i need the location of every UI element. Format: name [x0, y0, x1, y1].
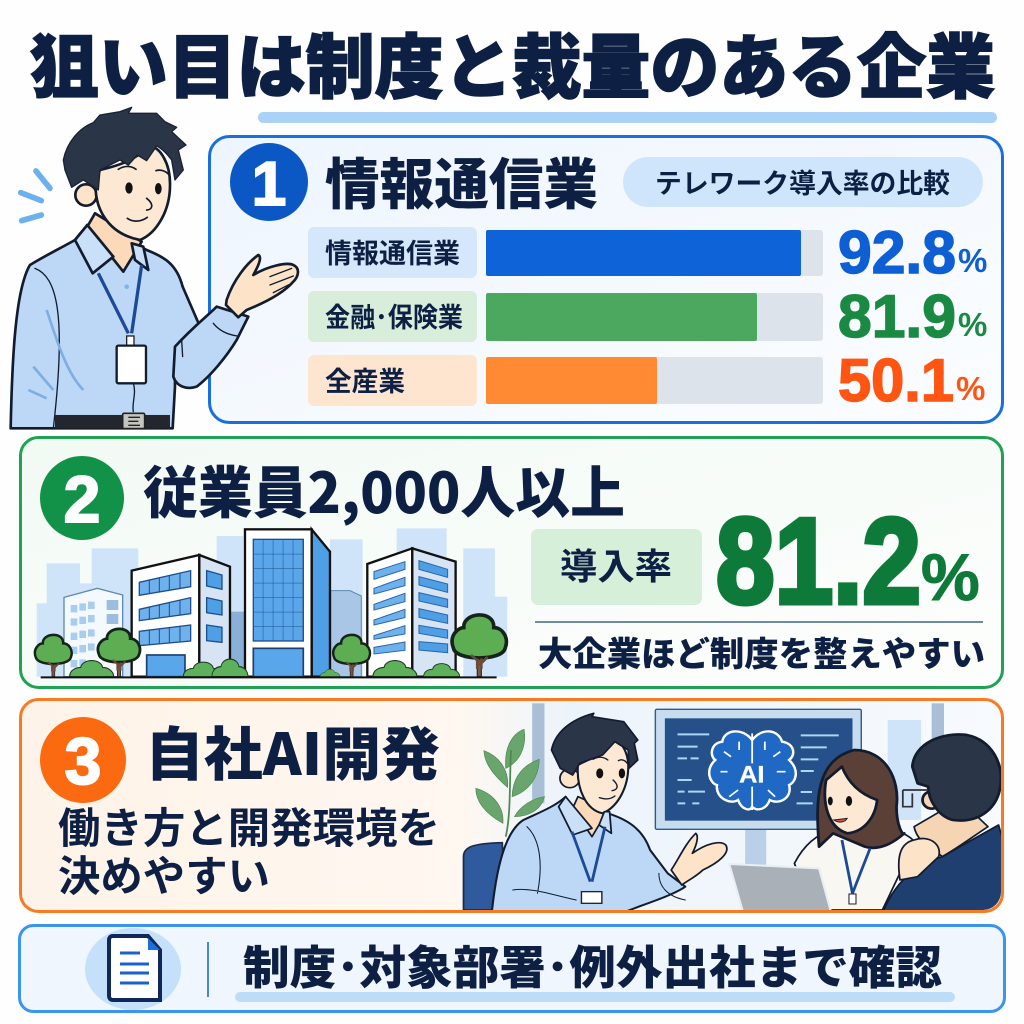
panel 1: information and communications	[210, 136, 1002, 422]
number badge 3	[40, 717, 126, 803]
man from behind	[883, 733, 1001, 910]
description: 決めやすい	[58, 843, 270, 904]
bar row: 情報通信業 92.8%: 92.8	[838, 219, 956, 286]
number badge 2: 2	[64, 462, 100, 536]
pill: 導入率: 導入率	[560, 538, 672, 590]
bar row: 情報通信業 92.8%	[308, 219, 987, 286]
heading: 自社AI開発: 自社AI開発	[145, 708, 440, 792]
heading: 従業員2,000人以上: 従業員2,000人以上	[143, 449, 625, 530]
number badge 1: 1	[252, 150, 286, 219]
bar row: 全産業 50.1%: %	[956, 370, 985, 407]
heading: 情報通信業: 情報通信業	[325, 140, 598, 220]
number badge 2	[40, 456, 124, 540]
speaking man	[492, 713, 727, 913]
bar row: 情報通信業 92.8%: %	[958, 242, 987, 279]
pill: 導入率	[531, 529, 702, 605]
woman	[794, 750, 914, 910]
bar row: 情報通信業 92.8%: 情報通信業	[325, 232, 460, 271]
panel 4: checklist footer	[20, 926, 1004, 1012]
bar row: 金融・保険業 81.9%	[308, 283, 987, 350]
description	[58, 795, 440, 904]
panel 2: 2000+ employee companies	[20, 438, 1002, 688]
plant	[476, 729, 544, 837]
sparks	[21, 171, 50, 221]
number badge 3: 3	[65, 724, 101, 798]
title: 狙い目は制度と裁量のある企業	[30, 12, 995, 113]
pill: comparison caption: テレワーク導入率の比較	[655, 162, 950, 201]
chair	[464, 843, 506, 910]
illustration: presenting man	[11, 107, 298, 429]
icon: document	[85, 928, 181, 1010]
bar row: 全産業 50.1%: 全産業	[325, 360, 405, 399]
closing message: 制度･対象部署･例外出社まで確認	[243, 932, 942, 998]
big number 81.2%: %	[921, 540, 980, 614]
number badge 1	[230, 143, 308, 221]
bar row: 金融・保険業 81.9%: 81.9	[838, 283, 956, 350]
note: 大企業ほど制度を整えやすい: 大企業ほど制度を整えやすい	[538, 627, 985, 676]
illustration: office buildings	[35, 528, 507, 677]
highlight underline	[235, 992, 955, 1002]
bar row: 全産業 50.1%: 50.1	[838, 347, 954, 414]
AI brain icon: AI	[739, 762, 764, 788]
panel 3: in-house AI development	[20, 700, 1023, 913]
bar row: 金融・保険業 81.9%: 金融･保険業	[325, 296, 463, 335]
bar row: 全産業 50.1%	[308, 347, 985, 414]
pill: comparison caption	[623, 157, 983, 207]
AI brain icon	[709, 731, 796, 810]
illustration: team meeting with AI monitor	[460, 700, 1023, 913]
monitor	[745, 828, 766, 865]
laptop	[729, 864, 831, 913]
bar row: 金融・保険業 81.9%: %	[958, 306, 987, 343]
description: 働き方と開発環境を	[58, 795, 440, 856]
big number 81.2%: 81.2	[716, 493, 921, 629]
